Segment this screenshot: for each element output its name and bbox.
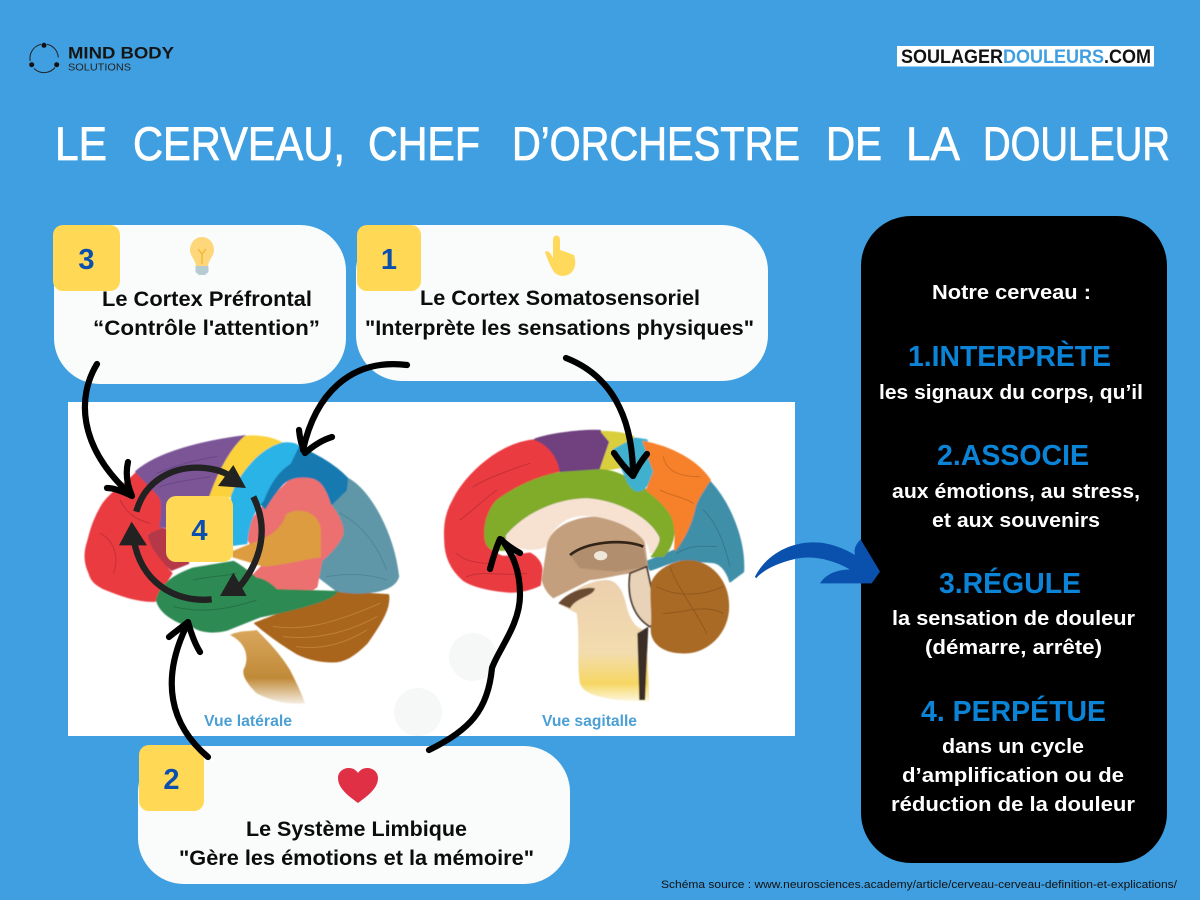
icon: pointing hand bbox=[545, 236, 575, 276]
badge 1: 1 bbox=[381, 244, 397, 276]
arrow: card 1 to sagittal view bbox=[566, 358, 647, 476]
item 4: dans un cycle bbox=[942, 735, 1084, 758]
decorative pale discs on illustration bbox=[394, 633, 497, 736]
logo: Mind Body Solutions bbox=[29, 43, 174, 74]
item 4: d’amplification ou de bbox=[902, 764, 1124, 787]
item 3 bbox=[892, 566, 1135, 659]
card 3: Cortex Préfrontal: “Contrôle l'attention” bbox=[93, 317, 320, 340]
item 4: 4. PERPÉTUE bbox=[921, 694, 1106, 728]
card 1: Cortex Somatosensoriel: Le Cortex Somatosensoriel bbox=[420, 287, 700, 310]
item 2: aux émotions, au stress, bbox=[892, 480, 1140, 503]
item 4: réduction de la douleur bbox=[891, 793, 1135, 816]
badge 1 bbox=[357, 225, 421, 291]
cycle arrows around badge 4 bbox=[119, 465, 262, 600]
logo: Mind Body Solutions: MIND BODY bbox=[68, 44, 174, 62]
card 3: Cortex Préfrontal bbox=[54, 225, 346, 384]
title: CHEF bbox=[368, 117, 480, 170]
item 1 bbox=[879, 339, 1143, 404]
icon: light bulb bbox=[190, 237, 214, 275]
title bbox=[55, 117, 1170, 170]
source note: Schéma source : www.neurosciences.academy/article/cerveau-cerveau-definition-et-explications/ bbox=[661, 879, 1178, 891]
caption: Vue latérale: Vue latérale bbox=[204, 713, 292, 730]
badge 3 bbox=[53, 225, 120, 291]
title: LA bbox=[906, 117, 961, 170]
title: DE bbox=[826, 117, 882, 170]
logo: Mind Body Solutions: SOLUTIONS bbox=[68, 62, 131, 74]
badge 2 bbox=[139, 745, 204, 811]
card 2: Système Limbique: Le Système Limbique bbox=[246, 818, 467, 841]
illustration: lateral view of brain bbox=[85, 436, 398, 704]
item 3: 3.RÉGULE bbox=[939, 566, 1081, 600]
title: D’ORCHESTRE bbox=[512, 117, 800, 170]
arrow: card 3 to frontal lobe bbox=[85, 364, 132, 496]
illustration: sagittal view of brain bbox=[445, 431, 743, 702]
title: LE bbox=[55, 117, 107, 170]
item 2: et aux souvenirs bbox=[932, 509, 1100, 532]
arrow: blue swoosh to summary panel bbox=[755, 539, 880, 583]
title: CERVEAU, bbox=[133, 117, 345, 170]
arrow: card 2 to sagittal view bbox=[429, 539, 520, 750]
arrow: card 2 to lateral view bbox=[169, 622, 208, 757]
caption: Vue sagitalle: Vue sagitalle bbox=[542, 713, 637, 730]
item 3: la sensation de douleur bbox=[892, 607, 1135, 630]
item 3: (démarre, arrête) bbox=[925, 636, 1102, 659]
item 2 bbox=[892, 440, 1140, 532]
badge 2: 2 bbox=[163, 764, 180, 796]
panel: summary bbox=[861, 216, 1167, 863]
badge 4 bbox=[166, 496, 233, 562]
card 3: Cortex Préfrontal: Le Cortex Préfrontal bbox=[102, 288, 312, 311]
item 4 bbox=[891, 694, 1135, 816]
card 1: Cortex Somatosensoriel: "Interprète les sensations physiques" bbox=[365, 317, 754, 340]
arrow: card 1 to lateral view bbox=[299, 364, 407, 453]
icon: heart bbox=[338, 768, 378, 803]
item 1: 1.INTERPRÈTE bbox=[908, 339, 1111, 373]
item 2: 2.ASSOCIE bbox=[937, 440, 1089, 472]
badge 4: 4 bbox=[191, 515, 208, 547]
card 2: Système Limbique: "Gère les émotions et la mémoire" bbox=[179, 847, 534, 870]
card 2: Système Limbique bbox=[138, 746, 570, 884]
panel: summary: Notre cerveau : bbox=[932, 281, 1091, 304]
card 1: Cortex Somatosensoriel bbox=[356, 225, 768, 381]
panel: brain illustration background bbox=[68, 402, 795, 736]
website badge: soulagerdouleurs.com: SOULAGERDOULEURS.COM bbox=[901, 47, 1151, 68]
badge 3: 3 bbox=[78, 244, 95, 276]
item 1: les signaux du corps, qu’il bbox=[879, 381, 1143, 404]
